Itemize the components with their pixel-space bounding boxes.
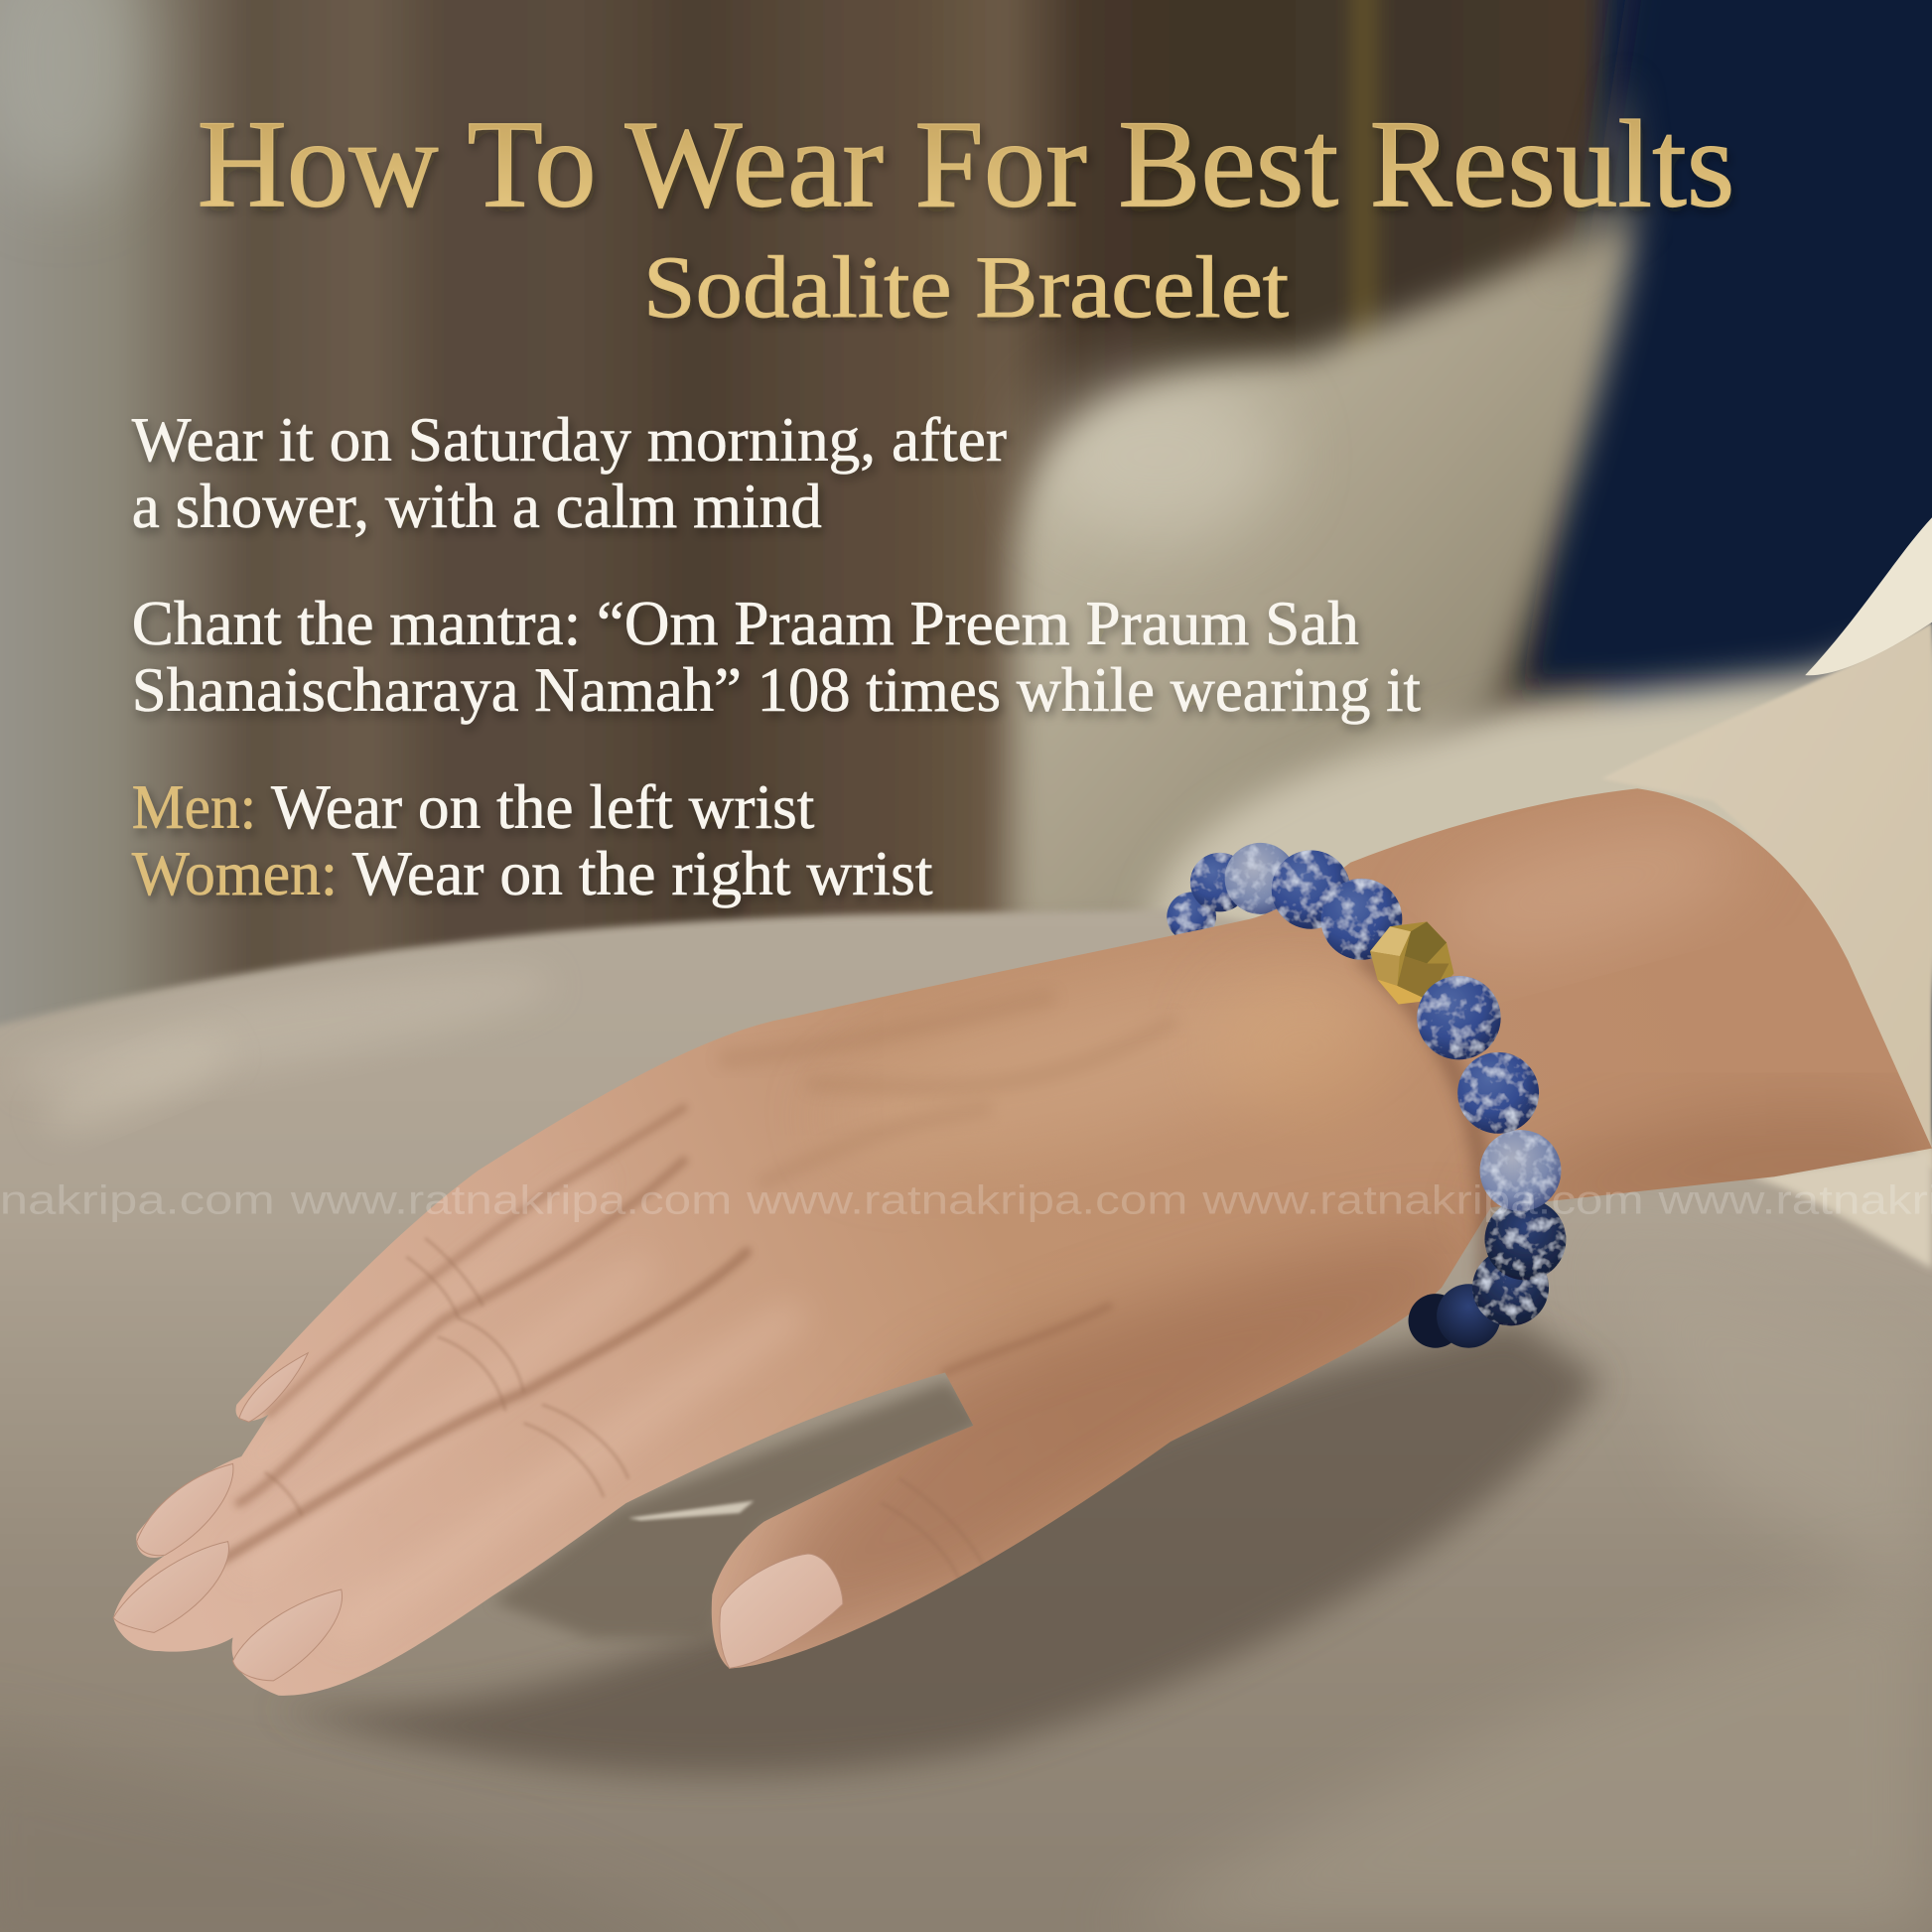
instruction: which wrist: Women: [132, 839, 338, 908]
instruction: when to wear: a shower, with a calm mind [132, 472, 822, 541]
instruction: which wrist: Men: [132, 772, 256, 842]
far side beads behind wrist [1167, 843, 1297, 941]
middle finger nail [113, 1542, 228, 1632]
index finger nail [233, 1589, 343, 1681]
instruction: when to wear [132, 405, 1007, 541]
instruction: mantra: Shanaischaraya Namah” 108 times while wearing it [132, 655, 1421, 725]
shadow between fingers and thumb [492, 1380, 986, 1639]
fabric fold soft light [10, 945, 557, 1112]
light streak left [34, 1023, 237, 1147]
instruction: which wrist [132, 772, 933, 908]
chair edge rising into top right [1553, 73, 1645, 283]
curtain and wall backdrop [0, 0, 1932, 1134]
upper sleeve [1805, 517, 1932, 675]
instruction: which wrist: Wear on the left wrist [271, 772, 815, 842]
watermark: www.ratnakripa.com [290, 1176, 732, 1222]
gold faceted bead [1370, 921, 1453, 1004]
bead row lower [1409, 1052, 1566, 1348]
armchair seat [1146, 617, 1932, 986]
instruction: which wrist: Wear on the right wrist [352, 839, 933, 908]
lower sleeve edge [1749, 1149, 1932, 1269]
draped fabric surface [0, 909, 1932, 1932]
pinky nail [239, 1353, 308, 1422]
watermark: www.ratnakripa.com [746, 1176, 1187, 1222]
title: How To Wear For Best Results [198, 94, 1734, 233]
shadow on wrist [1361, 955, 1486, 1282]
instruction: when to wear: Wear it on Saturday morning, after [132, 405, 1007, 475]
forearm upper highlight [1456, 820, 1724, 953]
hand cast shadow wide [271, 1318, 1601, 1775]
sodalite bracelet [1272, 850, 1566, 1348]
bead next to gold [1417, 976, 1501, 1059]
watermark [0, 1176, 1932, 1222]
instruction: mantra: Chant the mantra: “Om Praam Preem Praum Sah [132, 589, 1359, 658]
navy velvet panel [1522, 0, 1932, 690]
fabric fold right [1601, 1244, 1932, 1601]
tendons on back of hand [727, 998, 1047, 1059]
window glow top left [0, 0, 148, 198]
hand underside shading [727, 1232, 1466, 1676]
fabric dark fold [0, 1725, 763, 1932]
shirt sleeve cuff [1601, 517, 1932, 1269]
wrist golden highlight [1207, 973, 1405, 1121]
finger highlights [246, 1182, 788, 1626]
instruction: mantra [132, 589, 1421, 725]
thumb nail [720, 1554, 843, 1668]
subtitle: Sodalite Bracelet [643, 238, 1289, 337]
ring finger nail [137, 1463, 233, 1556]
fabric fold bottom [1109, 1565, 1932, 1932]
knuckle wrinkles [265, 1238, 986, 1584]
light sliver on fabric [628, 1501, 755, 1520]
hand and forearm [113, 788, 1932, 1696]
bead row upper [1272, 850, 1402, 960]
armchair highlight [1035, 369, 1282, 542]
photo background [0, 0, 1932, 1134]
watermark: www.ratnakripa.com [1201, 1176, 1644, 1222]
finger separations [221, 998, 1171, 1560]
forearm shading [1547, 1100, 1931, 1201]
back of hand highlight [890, 973, 1330, 1144]
armchair back [1008, 209, 1632, 936]
